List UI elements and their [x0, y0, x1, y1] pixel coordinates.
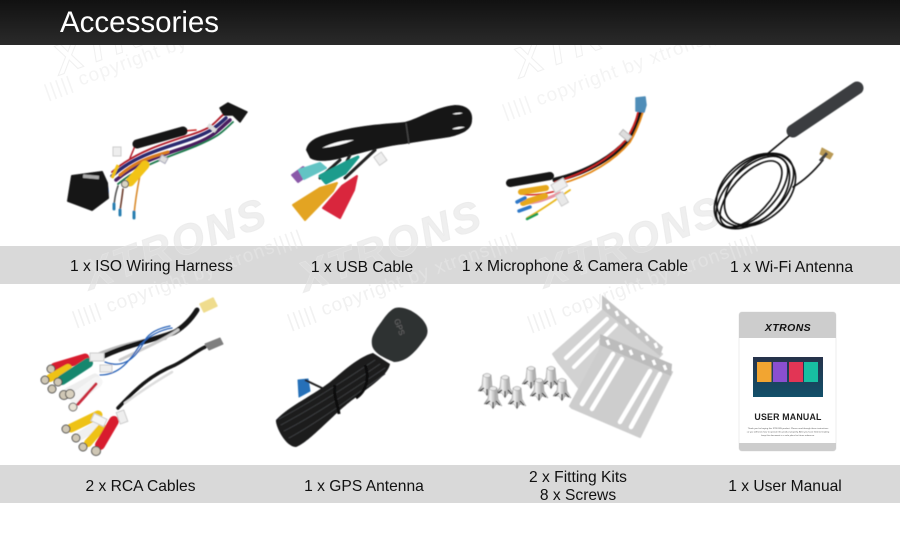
tags [90, 353, 104, 361]
watermarks on band: ||||| copyright by xtrons||||| [70, 226, 306, 330]
caption: GPS antenna: 1 x GPS Antenna [304, 478, 424, 495]
watermarks on white: ||||| copyright by xtrons||||| [42, 0, 278, 103]
upper RCA plugs [55, 358, 85, 367]
watermarks on white: ||||| copyright by xtrons||||| [525, 231, 761, 335]
ISO block connector [68, 172, 108, 210]
purple connector [292, 167, 312, 182]
lower RCA plugs [71, 415, 98, 428]
tube [137, 131, 183, 144]
blue connector [298, 379, 310, 397]
item: GPS antenna: GPS [392, 318, 406, 337]
cyan connector [299, 163, 326, 179]
upper bundle [95, 338, 165, 356]
item: USB cable [292, 105, 472, 220]
red connector [323, 176, 357, 218]
item: RCA cables [41, 298, 223, 456]
watermarks on white: XTRONS [530, 186, 729, 297]
item: ISO wiring harness [68, 103, 247, 218]
watermarks on white: ||||| copyright by xtrons||||| [500, 19, 736, 123]
manual fine print: Thank you for buying this XTRONS product. Please read through these instructions [748, 427, 829, 430]
front plate flange [600, 334, 672, 376]
caption: USB cable: 1 x USB Cable [311, 259, 413, 276]
caption band: top row [0, 246, 900, 284]
antenna puck [372, 308, 428, 362]
labels and pins [113, 147, 121, 156]
watermarks on white: ||||| copyright by xtrons||||| [285, 229, 521, 333]
manual logo: XTRONS [764, 322, 811, 334]
back plate [553, 310, 662, 398]
teal connector [320, 157, 358, 183]
gray connector [205, 338, 223, 350]
watermarks on band: XTRONS [75, 188, 274, 299]
watermarks on band: ||||| copyright by xtrons||||| [285, 229, 521, 333]
back plate flange [602, 295, 663, 356]
caption: fitting kits and screws: 2 x Fitting Kits [529, 469, 627, 486]
watermarks on white: ||||| copyright by xtrons||||| [70, 226, 306, 330]
watermarks on white [42, 0, 761, 335]
cable ties [551, 178, 568, 193]
item: GPS antenna [276, 308, 428, 447]
manual fine print [747, 427, 830, 437]
caption: ISO wiring harness: 1 x ISO Wiring Harness [70, 258, 233, 275]
manual fine print: keep this document in a safe place for future reference. [761, 434, 815, 437]
manual heading: USER MANUAL [754, 412, 822, 422]
yellow plugs [521, 188, 546, 203]
item: user manual [739, 312, 836, 451]
watermarks on band: ||||| copyright by xtrons||||| [525, 231, 761, 335]
yellow connector [293, 183, 337, 220]
watermarks on band [70, 186, 761, 335]
header bar [0, 0, 900, 45]
blue connector [636, 97, 646, 112]
item: microphone and camera cable [510, 97, 646, 219]
caption: user manual: 1 x User Manual [728, 478, 842, 495]
small pins [517, 198, 530, 211]
caption: Wi-Fi antenna: 1 x Wi-Fi Antenna [730, 259, 853, 276]
watermarks on white: XTRONS [75, 188, 274, 299]
watermarks on white: XTRONS [290, 190, 489, 301]
caption: microphone and camera cable: 1 x Microphone & Camera Cable [462, 258, 688, 275]
manual header [739, 312, 836, 338]
RCA plug [130, 165, 145, 182]
coiled cable [700, 136, 823, 243]
black jack [510, 176, 550, 183]
caption: fitting kits and screws [529, 469, 627, 504]
lower bundle [118, 347, 205, 408]
item: Wi-Fi antenna [700, 88, 857, 243]
item: fitting kits and screws [478, 295, 672, 437]
black braided loop [306, 105, 472, 161]
screws [478, 366, 571, 409]
small connector [220, 103, 247, 122]
SMA connector [820, 148, 833, 159]
front plate [570, 340, 672, 437]
coiled cable [276, 353, 390, 447]
manual footer [739, 443, 836, 451]
manual screen [753, 357, 823, 397]
title: Accessories [60, 6, 219, 39]
antenna body [793, 88, 857, 131]
caption: fitting kits and screws: 8 x Screws [540, 487, 616, 504]
beige connector [200, 298, 217, 312]
watermarks on band: XTRONS [530, 186, 729, 297]
watermarks on band: XTRONS [290, 190, 489, 301]
caption band: bottom row [0, 465, 900, 503]
manual fine print: so you will know how to operate this product properly. After you have finished reading [747, 430, 830, 434]
caption: RCA cables: 2 x RCA Cables [85, 478, 196, 495]
